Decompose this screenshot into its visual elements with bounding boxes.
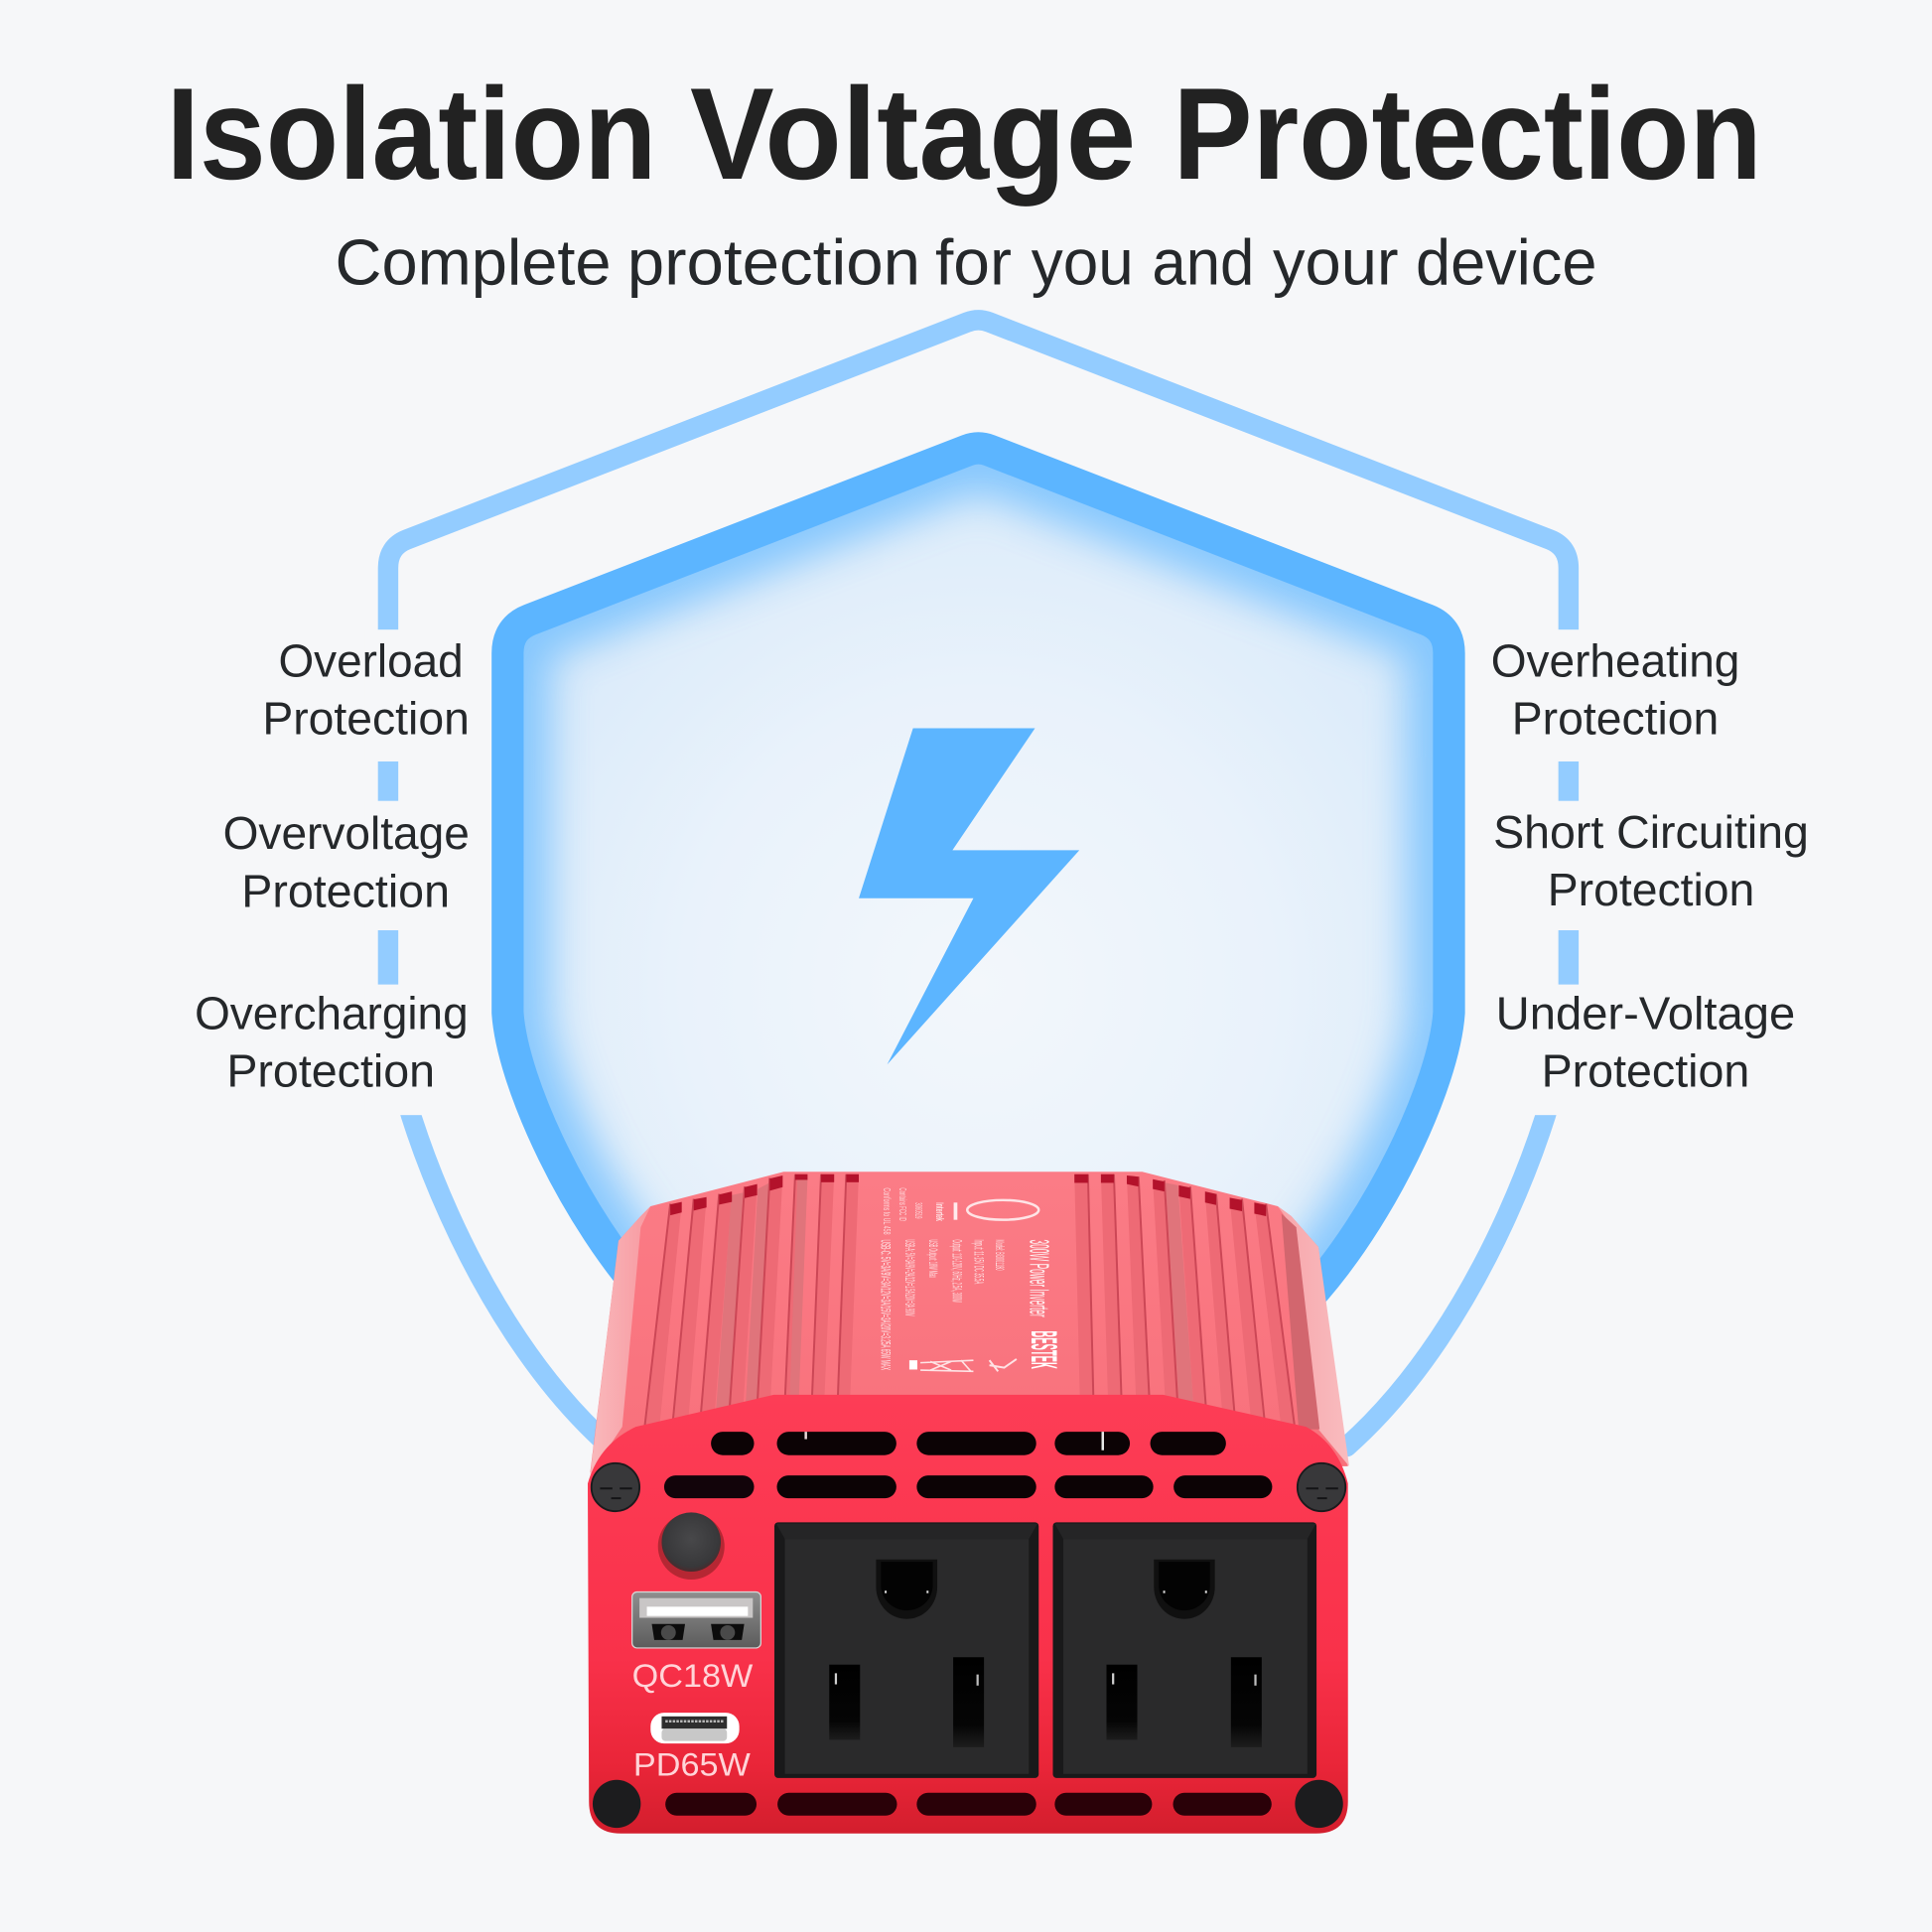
- subtitle: [336, 227, 1596, 299]
- labels: left protections: Protection: [241, 865, 450, 916]
- label printed on top: Input: 11-15V DC 35.5A: [972, 1240, 987, 1284]
- labels: right protections: Protection: [1512, 693, 1719, 745]
- labels: right protections: Overheating: [1491, 634, 1739, 686]
- label printed on top: Output: 110-120V, 60Hz, 2.5A, 300W: [949, 1240, 964, 1303]
- USB-C port: [650, 1713, 740, 1743]
- label printed on top: USB Output: 18W Max: [926, 1240, 940, 1278]
- label printed on top: [878, 1187, 1065, 1371]
- labels: left protections: Overvoltage: [223, 807, 470, 859]
- inverter product: USB-C: 5V=3A/9V=3A/12V=3A/15V=3A/20V=3.25A 65W MAX: [878, 1240, 893, 1370]
- port label PD65W: PD65W: [633, 1746, 751, 1782]
- inverter product: USB-A: 5V=3A/9V=2A/12V=1.5A/20V=3A 90W: [902, 1240, 917, 1315]
- port label QC18W: QC18W: [632, 1658, 754, 1694]
- label printed on top: Model: BI3001180: [993, 1240, 1007, 1271]
- title: [167, 61, 1762, 207]
- labels: right protections: Protection: [1542, 1045, 1749, 1097]
- labels: right protections: Under-Voltage: [1496, 987, 1795, 1038]
- label printed on top: 300W Power Inverter: [1025, 1240, 1055, 1317]
- inverter top housing: [590, 1172, 1349, 1475]
- subtitle: protection: [627, 227, 920, 299]
- subtitle: for: [935, 227, 1012, 299]
- title: Voltage: [690, 61, 1136, 207]
- labels: right protections: [1491, 634, 1809, 1097]
- labels: left protections: Overcharging: [195, 987, 469, 1038]
- labels: left protections: [195, 634, 470, 1097]
- subtitle: device: [1416, 227, 1596, 299]
- subtitle: your: [1273, 227, 1399, 299]
- inner shield with glow: [491, 432, 1465, 1302]
- label printed on top: Contains FCC ID: [897, 1187, 907, 1221]
- inverter product: [588, 1172, 1349, 1834]
- label printed on top: Intertek: [933, 1202, 945, 1221]
- USB-A port: [632, 1591, 760, 1648]
- labels: left protections: Protection: [262, 693, 470, 745]
- subtitle: you: [1032, 227, 1134, 299]
- label printed on top: 3060519: [912, 1202, 923, 1219]
- icon: lightning bolt: [859, 728, 1079, 1064]
- title: Protection: [1173, 61, 1762, 207]
- corner screws: [592, 1463, 1345, 1828]
- labels: right protections: Short Circuiting: [1493, 806, 1809, 858]
- labels: left protections: Overload: [278, 634, 464, 686]
- vent slots: [664, 1432, 1272, 1816]
- AC outlet left: [774, 1522, 1038, 1778]
- outer shield outline: [364, 320, 1591, 1447]
- label printed on top: Conforms to UL 458: [881, 1187, 892, 1235]
- inverter front face: [588, 1395, 1348, 1834]
- labels: right protections: Protection: [1548, 864, 1754, 915]
- title: Isolation: [167, 61, 656, 207]
- inverter product: BESTEK: [1024, 1330, 1065, 1369]
- power button: [658, 1512, 725, 1580]
- AC outlet right: [1052, 1522, 1316, 1778]
- subtitle: Complete: [336, 227, 612, 299]
- labels: left protections: Protection: [226, 1045, 435, 1097]
- subtitle: and: [1152, 227, 1254, 299]
